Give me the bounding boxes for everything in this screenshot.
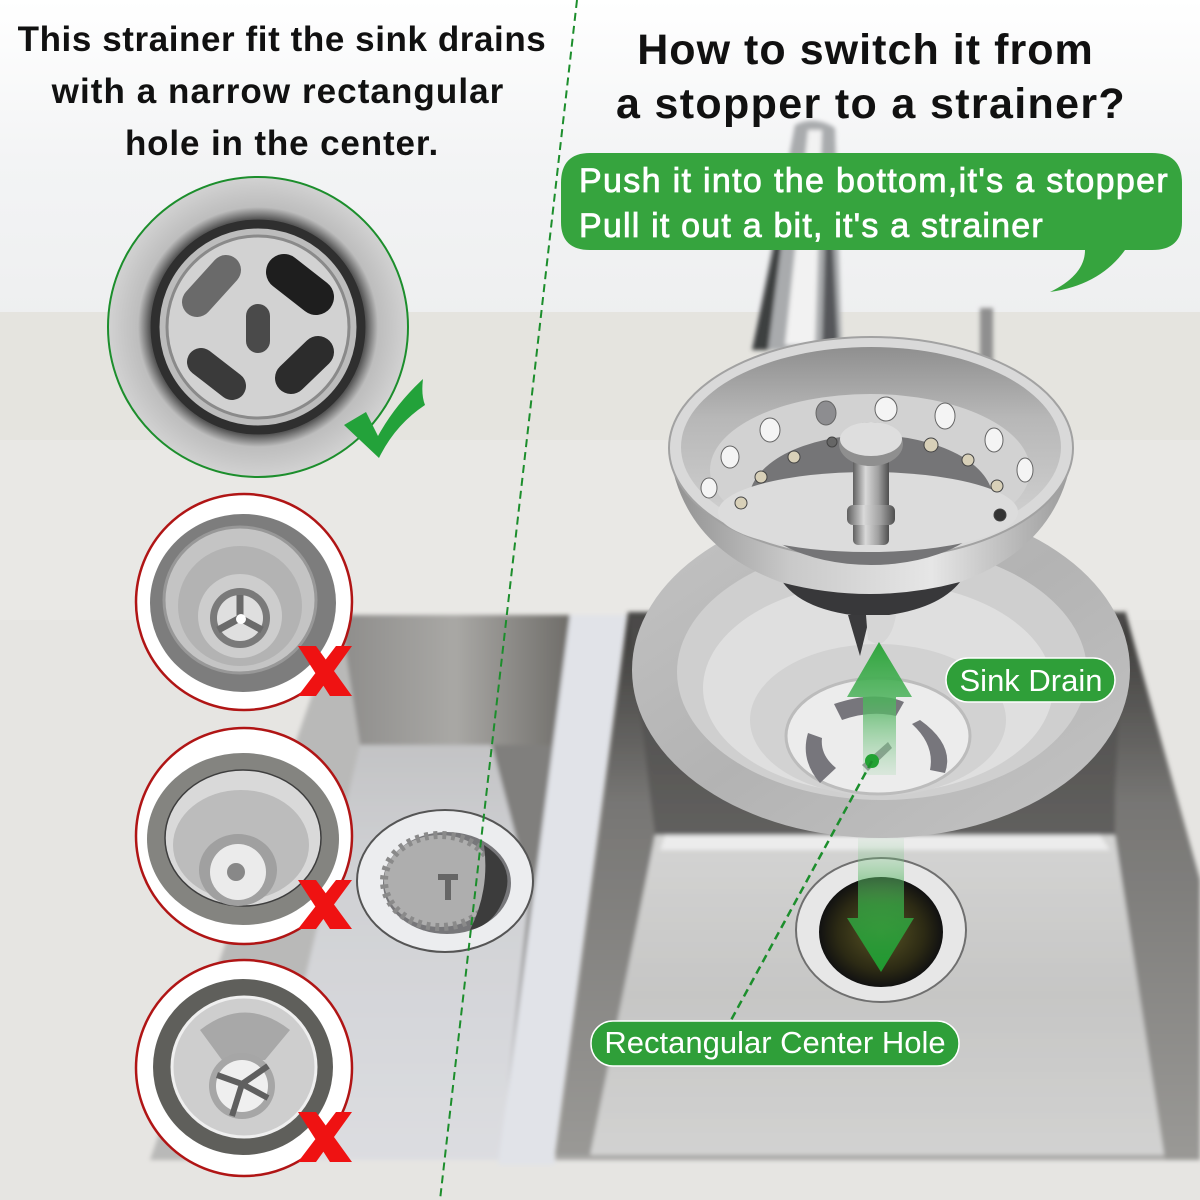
left sink drain — [357, 810, 533, 952]
arrow: down green — [847, 838, 914, 972]
bowl — [669, 448, 1073, 594]
speech bubble: Pull it out a bit, it's a strainer — [579, 207, 1044, 245]
arrow: up green — [847, 642, 912, 775]
sink drain flange — [632, 502, 1130, 838]
correct drain circle — [108, 177, 408, 477]
right sink drain hole — [796, 858, 966, 1002]
heading: fit description: This strainer fit the sink drains — [18, 20, 546, 59]
strainer basket — [669, 337, 1073, 656]
icon: green check — [344, 379, 425, 458]
icon: red cross 2 — [298, 880, 352, 929]
wrong drain circle 1 — [136, 494, 352, 710]
stem and knob — [853, 455, 889, 545]
dashed divider — [440, 0, 577, 1200]
dark slot band — [749, 435, 993, 565]
label: rectangular center hole: Rectangular Center Hole — [604, 1025, 946, 1060]
pointer line — [730, 754, 879, 1022]
heading: fit description: with a narrow rectangular — [51, 72, 504, 111]
faucet in background — [752, 121, 993, 368]
left sink basin — [150, 615, 628, 1165]
icon: red cross 1 — [298, 646, 352, 696]
heading: how to switch — [616, 26, 1126, 128]
icon: red cross 3 — [298, 1112, 352, 1162]
wrong drain circle 2 — [136, 728, 352, 944]
heading: fit description: hole in the center. — [125, 124, 439, 163]
label: sink drain: Sink Drain — [960, 663, 1102, 698]
rubber seal — [780, 578, 963, 617]
speech bubble — [561, 153, 1182, 292]
label: sink drain — [946, 658, 1115, 702]
perforations — [701, 397, 1033, 498]
heading: how to switch: How to switch it from — [637, 26, 1094, 74]
heading: how to switch: a stopper to a strainer? — [616, 80, 1126, 128]
right sink basin — [555, 610, 1200, 1160]
speech bubble: Push it into the bottom,it's a stopper — [579, 162, 1169, 200]
heading: fit description — [18, 20, 546, 163]
wrong drain circle 3 — [136, 960, 352, 1176]
